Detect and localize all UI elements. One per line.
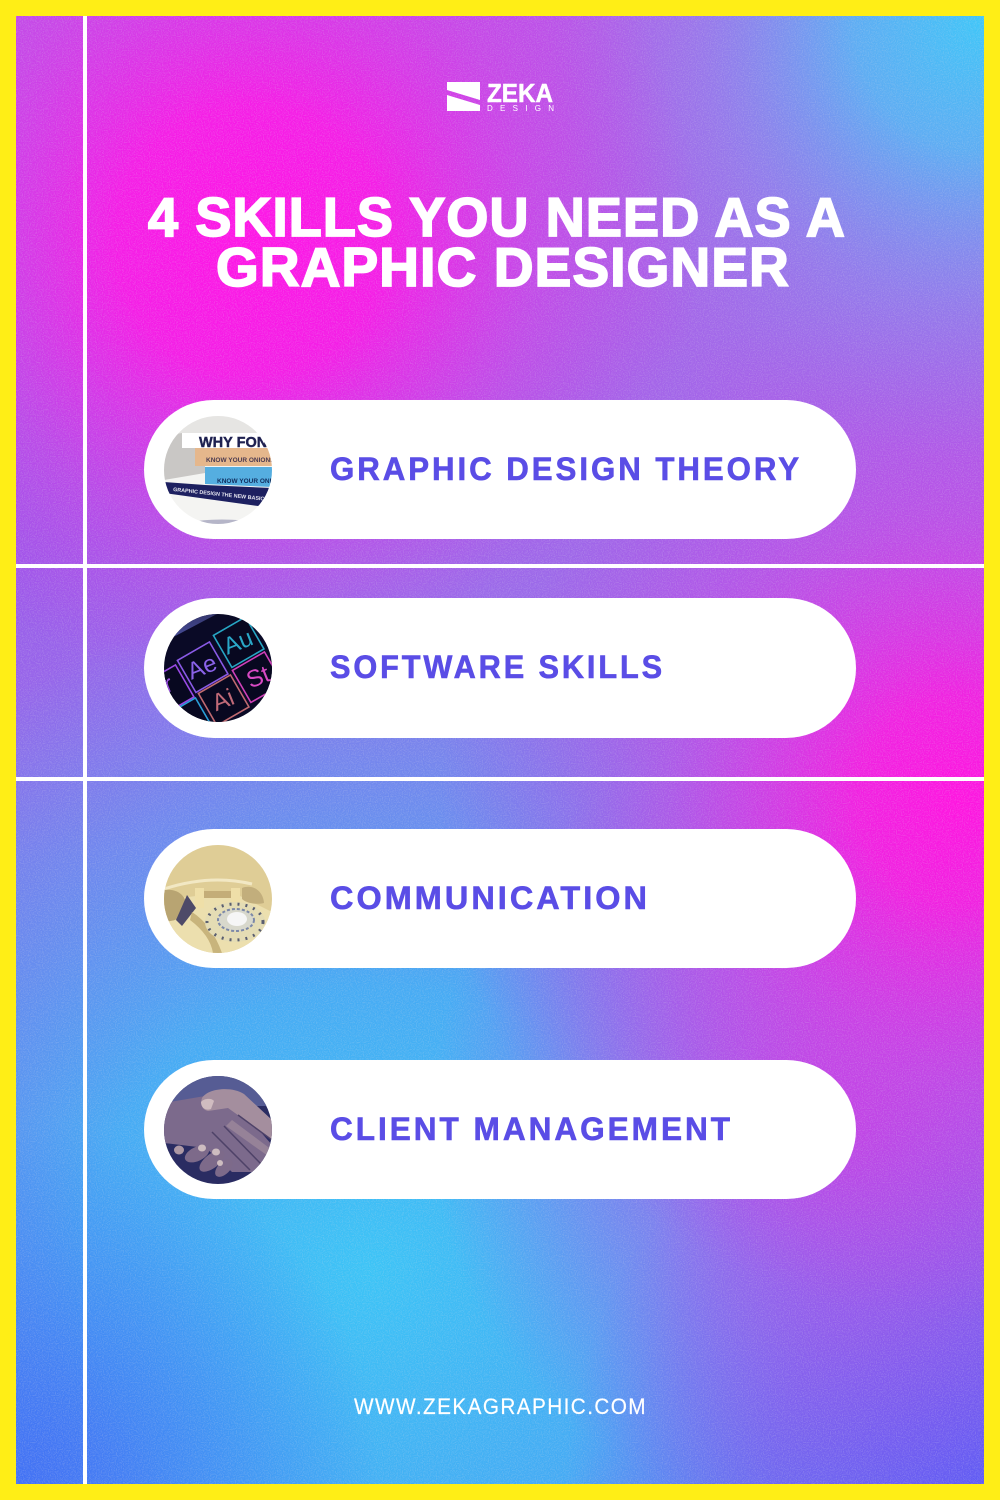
title: 4 SKILLS YOU NEED AS A <box>148 186 846 248</box>
panel: communication <box>144 829 856 968</box>
photo: stacked design books: WHY FONT <box>199 435 276 451</box>
label: CLIENT MANAGEMENT <box>330 1111 733 1147</box>
photo: Adobe app icons: Au <box>220 624 257 660</box>
label: GRAPHIC DESIGN THEORY <box>330 451 802 487</box>
photo: Adobe app icons <box>164 614 272 722</box>
panel: client management <box>144 1060 856 1199</box>
photo: vintage telephone <box>164 845 272 953</box>
photo: stacked design books <box>164 416 272 524</box>
photo: Adobe app icons: Ae <box>184 649 221 685</box>
logo: Zeka Design <box>447 78 554 113</box>
label: SOFTWARE SKILLS <box>330 649 665 685</box>
logo mark <box>447 82 480 111</box>
website url: WWW.ZEKAGRAPHIC.COM <box>354 1394 647 1419</box>
photo: Adobe app icons: St <box>243 661 274 694</box>
label: COMMUNICATION <box>330 880 650 916</box>
title: GRAPHIC DESIGNER <box>216 236 790 298</box>
photo: Adobe app icons: Ai <box>208 684 238 717</box>
panel: software skills <box>143 598 856 748</box>
photo: stacked design books: GRAPHIC DESIGN THE NEW BASICS SECOND <box>173 487 293 506</box>
logo wordmark: ZEKA <box>487 78 553 108</box>
photo: handshake <box>164 1076 272 1184</box>
panel: graphic design theory <box>144 400 856 539</box>
logo subtitle: DESIGN <box>487 104 554 113</box>
photo: Adobe app icons: r <box>159 670 177 698</box>
photo: stacked design books: KNOW YOUR ONIONS / <box>206 457 278 464</box>
photo: stacked design books: KNOW YOUR ONIONS <box>217 478 286 485</box>
title <box>148 186 846 298</box>
